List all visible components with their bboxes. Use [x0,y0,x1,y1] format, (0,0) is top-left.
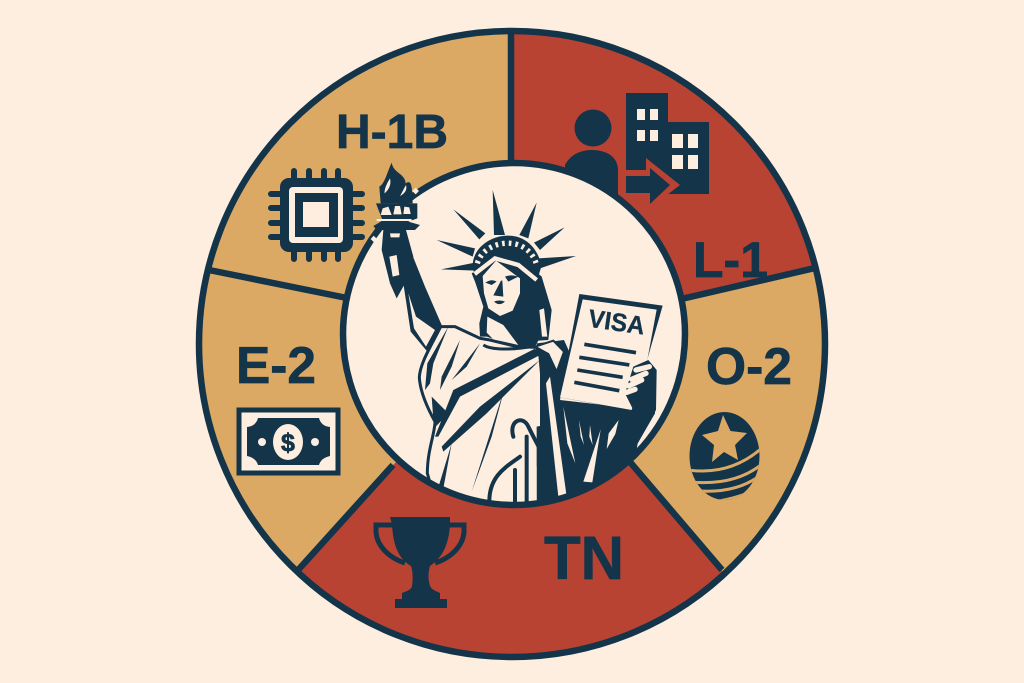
shoulder drape [535,341,564,372]
face [483,261,520,316]
icon: banknote [239,410,338,473]
wheel outline and dividers [199,31,825,657]
segment: H-1B [208,31,512,344]
segment: O-2 [512,268,825,574]
segment: TN [297,344,725,657]
label: L-1: L-1 [693,232,768,288]
statue body clipped to medallion [403,253,655,508]
label: H-1B: H-1B [336,106,448,159]
label: TN: TN [544,524,624,592]
icon: person moving to office buildings [565,93,709,208]
hand holding document [625,360,657,443]
icon: trophy [376,517,464,608]
segment: L-1 [511,31,816,344]
icon: star ball [690,412,760,500]
visa heading: VISA [586,305,647,340]
visa document [560,294,663,411]
illustration: Statue of Liberty holding visa [403,190,663,508]
label: E-2: E-2 [236,337,316,395]
right side dark drapery [537,340,655,507]
label: O-2: O-2 [706,338,792,396]
icon: microchip [271,171,362,259]
medallion ring [343,163,685,505]
hair and neck [472,257,552,347]
crown [473,236,541,282]
robe [418,325,540,480]
robe folds [425,327,567,507]
segment: E-2 [199,268,512,571]
crown rays [437,190,576,271]
centre medallion [343,163,685,505]
icon: banknote: $ [281,429,295,457]
raised arm [403,253,442,352]
visa wheel infographic [196,28,828,660]
torch [372,163,420,298]
